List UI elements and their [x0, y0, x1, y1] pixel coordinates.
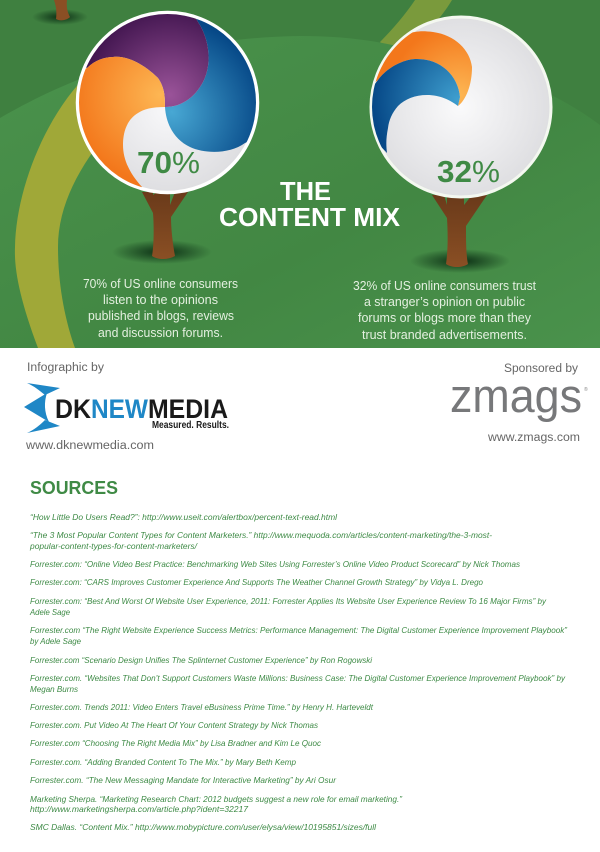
text block: sources list: Megan Burns: [30, 684, 79, 694]
text block: sources list: Forrester.com “Scenario Design Unifies The Splinternet Customer Experience” by Ron Rogowski: [30, 655, 373, 665]
text block: sources list: Adele Sage: [29, 607, 70, 617]
logo text: zmags: zmags: [450, 369, 582, 422]
background: green hills: [0, 0, 600, 348]
logo text: DK New Media: DK: [55, 394, 91, 424]
text block: sources list: Marketing Sherpa. “Marketing Research Chart: 2012 budgets suggest a new role for email marketing.”: [30, 794, 403, 804]
tree: right trunk: [410, 195, 510, 273]
text: 70% description: [83, 277, 238, 340]
text: 32% description: forums or blogs more than they: [358, 311, 532, 325]
tree: top-left partial: [32, 0, 88, 25]
text block: sources list: SMC Dallas. “Content Mix.” http://www.mobypicture.com/user/elysa/view/10195851/sizes/full: [30, 822, 377, 832]
credit: infographic by: [24, 362, 229, 452]
text: 32% description: 32% of US online consumers trust: [353, 279, 537, 293]
tree: left trunk: [112, 192, 212, 264]
logo text: DK New Media: [55, 394, 229, 431]
title: CONTENT MIX: [219, 202, 401, 232]
text block: sources list: Forrester.com: “Online Video Best Practice: Benchmarking Web Sites Using Forrester’s Online Video Product Scorecard” by Nick Thomas: [30, 559, 521, 569]
text block: sources list: Forrester.com: “CARS Improves Customer Experience And Supports The Weather Channel Growth Strategy” by Vidya L. Drego: [30, 577, 483, 587]
heading: sources: SOURCES: [30, 478, 118, 498]
text: 32% description: [353, 279, 537, 342]
chart: 70% pie circle: [76, 10, 260, 194]
text block: sources list: “How Little Do Users Read?”: http://www.useit.com/alertbox/percent-text-read.html: [30, 512, 338, 522]
title: THE: [280, 176, 331, 206]
text block: sources list: http://www.marketingsherpa.com/article.php?ident=32217: [30, 804, 248, 814]
text block: sources list: Forrester.com “The Right Website Experience Success Metrics: Performance Management: The Digital Customer Experience Improvement Playbook”: [30, 625, 568, 635]
text block: sources list: Forrester.com. “Adding Branded Content To The Mix.” by Mary Beth Kemp: [30, 757, 296, 767]
credit: sponsored by: Sponsored by: [504, 363, 578, 375]
text block: sources list: by Adele Sage: [30, 636, 81, 646]
text block: sources list: Forrester.com. Put Video At The Heart Of Your Content Strategy by Nick Thomas: [30, 720, 319, 730]
text: 70% description: 70% of US online consumers: [83, 277, 238, 291]
value: 70%: 70%: [137, 145, 200, 180]
text block: sources list: Forrester.com. “Websites That Don’t Support Customers Waste Millions: Business Case: The Digital Customer Experience Improvement Playbook” by: [30, 673, 566, 683]
text block: sources list: “The 3 Most Popular Content Types for Content Marketers.” http://www.mequoda.com/articles/content-marketing/the-3-most-: [30, 530, 492, 540]
credit: sponsored by: www.zmags.com: [487, 432, 580, 444]
text block: sources list: Forrester.com “Choosing The Right Media Mix” by Lisa Bradner and Kim Le Quoc: [30, 738, 322, 748]
credit: sponsored by: [450, 363, 588, 444]
logo text: DK New Media: NEW: [91, 394, 148, 424]
text: 32% description: trust branded advertisements.: [362, 328, 527, 342]
footer panel: white background: [0, 348, 600, 852]
credit: infographic by: Infographic by: [27, 362, 104, 374]
text block: sources list: [29, 512, 568, 832]
text: 70% description: published in blogs, reviews: [88, 309, 234, 323]
credit: sponsored by: ®: [584, 386, 588, 393]
logo text: DK New Media: MEDIA: [148, 394, 228, 424]
credit: infographic by: www.dknewmedia.com: [25, 440, 154, 452]
text: 70% description: listen to the opinions: [103, 293, 218, 307]
title: [219, 176, 401, 232]
icon: DK New Media logo mark: [24, 383, 60, 433]
text block: sources list: Forrester.com: “Best And Worst Of Website User Experience, 2011: Forrester Applies Its Website User Experience Review To 16 Major Firms” by: [30, 596, 547, 606]
text: 32% description: a stranger’s opinion on public: [364, 295, 525, 309]
text: 70% description: and discussion forums.: [98, 326, 223, 340]
logo text: DK New Media: Measured. Results.: [152, 420, 229, 431]
text block: sources list: Forrester.com. Trends 2011: Video Enters Travel eBusiness Prime Time.” by Henry H. Harteveldt: [30, 702, 374, 712]
text block: sources list: popular-content-types-for-content-marketers/: [29, 541, 199, 551]
chart: 32% pie circle: [365, 17, 551, 197]
value: 32%: 32%: [437, 154, 500, 189]
text block: sources list: Forrester.com. “The New Messaging Mandate for Interactive Marketing” by Ari Osur: [30, 775, 337, 785]
